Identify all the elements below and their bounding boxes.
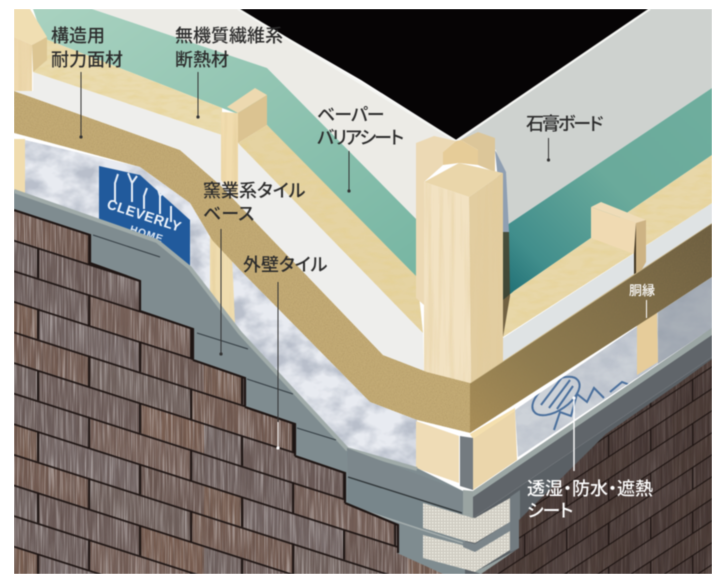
insulation sheet right: [514, 276, 712, 457]
label 5: 窯業系タイル: [203, 181, 306, 201]
label 3: [316, 105, 404, 193]
dark gap under right rail: [465, 357, 712, 574]
CLEVERLY HOME logo on sheet: [99, 166, 190, 270]
wood studs: [30, 30, 715, 340]
ceiling void: [238, 9, 649, 140]
mesh panels: [423, 498, 510, 572]
label 8: [527, 396, 653, 521]
small wood block right: [591, 202, 646, 280]
label 4: 石膏ボード: [526, 114, 603, 134]
label 1: [51, 26, 123, 139]
label 4: [526, 114, 603, 162]
post shadow on wood: [503, 232, 510, 337]
lower left stud: [14, 139, 25, 194]
post shadow: [495, 150, 509, 232]
wood block vertical: [221, 88, 267, 200]
label 6: 外壁タイル: [243, 255, 328, 275]
stud right lower: [637, 313, 658, 375]
exterior tile wall left: [14, 205, 444, 575]
label 7: [629, 283, 655, 318]
inner white sheet left: [14, 72, 424, 372]
label 7: 胴縁: [629, 283, 655, 298]
wood corner post top left: [14, 9, 47, 91]
label 5: ベース: [203, 204, 254, 224]
label 8: シート: [527, 501, 573, 521]
insulation sheet left: [14, 130, 424, 475]
metal rails left: [347, 448, 465, 543]
CLEVERLY HOME logo on sheet: CLEVERLY: [105, 196, 184, 235]
CLEVERLY HOME logo on sheet: HOME: [128, 223, 165, 246]
label 2: [175, 26, 283, 119]
vapor barrier sheet left: [33, 9, 417, 290]
wood grain: [30, 46, 470, 380]
inner white sheet right: [502, 203, 712, 361]
gypsum board left: [92, 9, 456, 220]
main corner post: [416, 132, 503, 384]
label 2: 断熱材: [175, 50, 229, 70]
metal rail right: [463, 328, 712, 574]
label 2: 無機質繊維系: [175, 26, 283, 46]
wood post lower left face: [416, 421, 459, 483]
label 1: 耐力面材: [51, 50, 123, 70]
metal edge highlight: [14, 191, 417, 469]
vapor barrier sheet right: [498, 88, 712, 305]
label 5: [203, 181, 306, 356]
gypsum board right: [460, 9, 712, 227]
fastening lines on metal: [93, 235, 336, 440]
metal corner trim: [460, 436, 473, 490]
label 3: バリアシート: [316, 128, 404, 148]
label 1: 構造用: [51, 26, 105, 46]
lower middle stud: [210, 235, 235, 325]
sheet logo: [530, 375, 629, 431]
metal starter base left: [14, 190, 475, 574]
wood post lower right face: [473, 410, 517, 490]
label 6: [243, 255, 328, 450]
structural board band: [14, 85, 714, 440]
tile edge shadows: [14, 210, 398, 553]
label 8: 透湿・防水・遮熱: [527, 479, 653, 499]
label 3: ベーパー: [317, 105, 384, 125]
exterior tile wall right: [478, 355, 714, 575]
